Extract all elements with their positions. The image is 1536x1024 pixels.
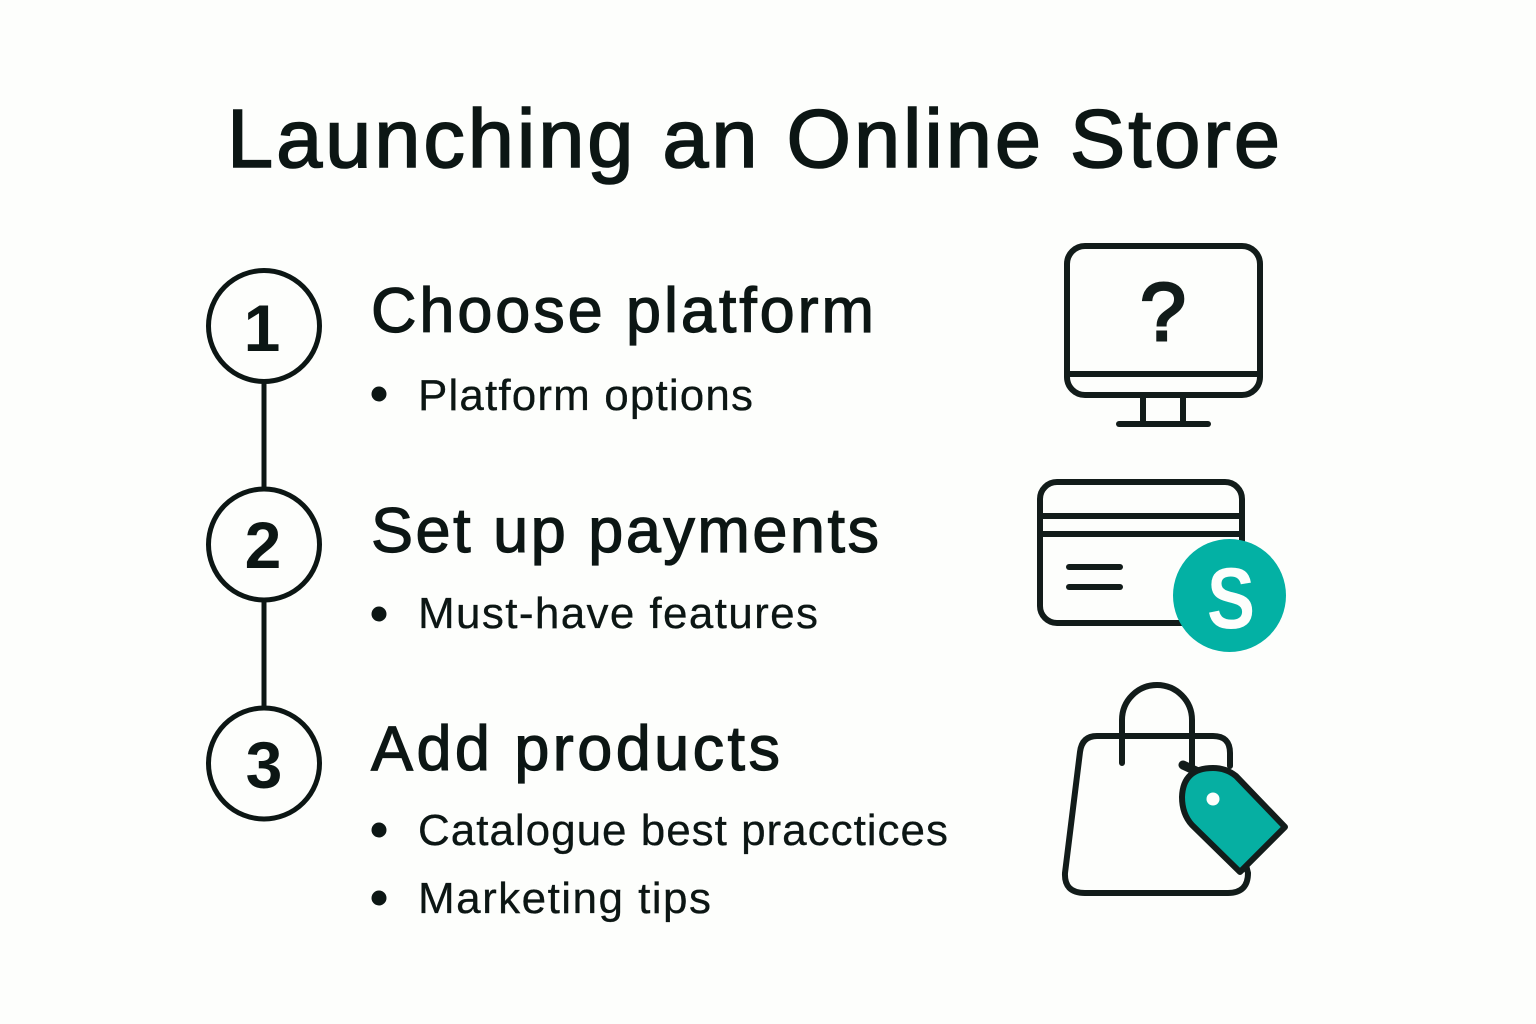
step 3 text: [371, 714, 948, 923]
step 3 text: Marketing tips: [418, 874, 711, 923]
icon: shopping bag with price tag: [1065, 685, 1285, 893]
step 3 text: Catalogue best pracctices: [418, 806, 948, 855]
step 3 badge: [208, 708, 320, 819]
step 2 text: [371, 496, 879, 638]
step 1 text: [371, 276, 874, 420]
step 1 text: Choose platform: [371, 276, 874, 346]
step 2 text: Set up payments: [371, 496, 879, 566]
step 2 badge: 2: [245, 508, 281, 582]
step 2 badge: [208, 489, 320, 600]
icon: credit card with dollar badge: [1040, 482, 1286, 652]
connector lines: [262, 382, 266, 708]
step 3 badge: 3: [246, 728, 282, 802]
icon: monitor with question mark: ?: [1140, 267, 1186, 358]
step 1 badge: 1: [244, 291, 280, 365]
icon: monitor with question mark: [1067, 246, 1260, 424]
timeline: [208, 270, 320, 819]
step 1 text: Platform options: [418, 371, 753, 420]
step 3 text: Add products: [371, 714, 780, 784]
icon: credit card with dollar badge: S: [1207, 551, 1255, 647]
title: Launching an Online Store: [227, 92, 1280, 185]
step 2 text: Must-have features: [418, 589, 818, 638]
step 1 badge: [208, 270, 320, 382]
